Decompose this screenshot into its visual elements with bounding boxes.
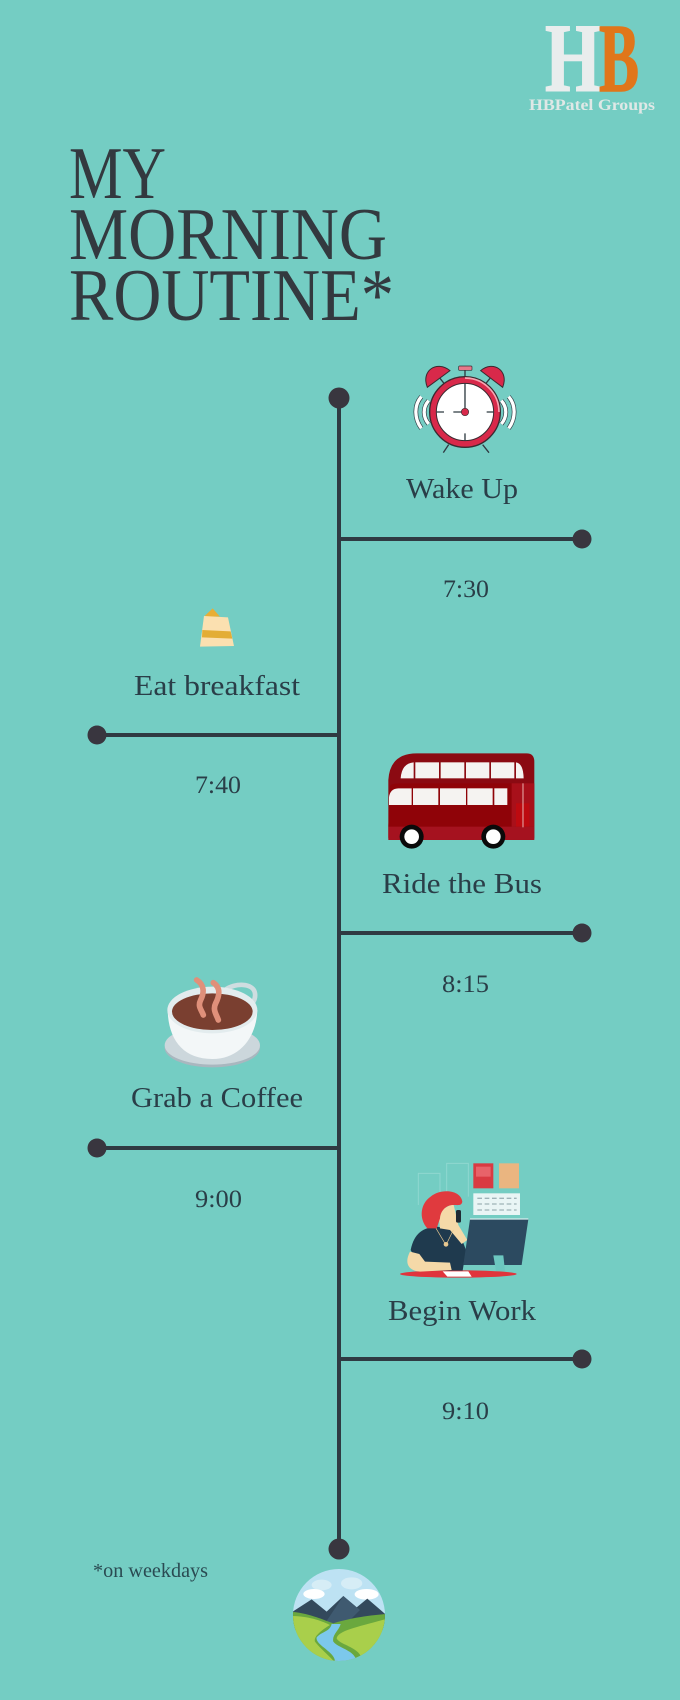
logo: HBPatel Groups: B [599,5,639,113]
logo: HBPatel Groups [529,5,655,114]
step: Wake Up: Wake Up [406,473,518,505]
title: MORNING [69,194,387,276]
icon: alarm clock [416,366,514,453]
step: Ride the Bus: 8:15 [442,971,489,998]
icon: coffee cup [165,980,260,1067]
step: Ride the Bus [339,868,592,998]
step: Grab a Coffee: 9:00 [195,1186,242,1213]
step: Eat breakfast: Eat breakfast [134,670,300,702]
timeline spine [328,388,350,1560]
step: Grab a Coffee [88,1082,339,1213]
icon: landscape badge [293,1569,385,1661]
step: Begin Work: Begin Work [388,1295,537,1327]
step: Eat breakfast [88,670,339,799]
step: Begin Work: 9:10 [442,1398,489,1425]
icon: woman working at computer [400,1163,528,1278]
step: Begin Work [339,1295,592,1425]
icon: double decker bus [388,753,534,849]
step: Eat breakfast: 7:40 [195,772,241,799]
footnote: *on weekdays [93,1560,208,1582]
title [69,133,394,337]
step: Wake Up [339,473,592,603]
step: Ride the Bus: Ride the Bus [382,868,542,900]
title: ROUTINE* [69,255,394,337]
icon: cake slice [200,608,234,647]
step: Grab a Coffee: Grab a Coffee [131,1082,303,1114]
title: MY [69,133,166,215]
logo: HBPatel Groups: H [545,5,601,113]
logo: HBPatel Groups: HBPatel Groups [529,97,655,114]
step: Wake Up: 7:30 [443,576,489,603]
